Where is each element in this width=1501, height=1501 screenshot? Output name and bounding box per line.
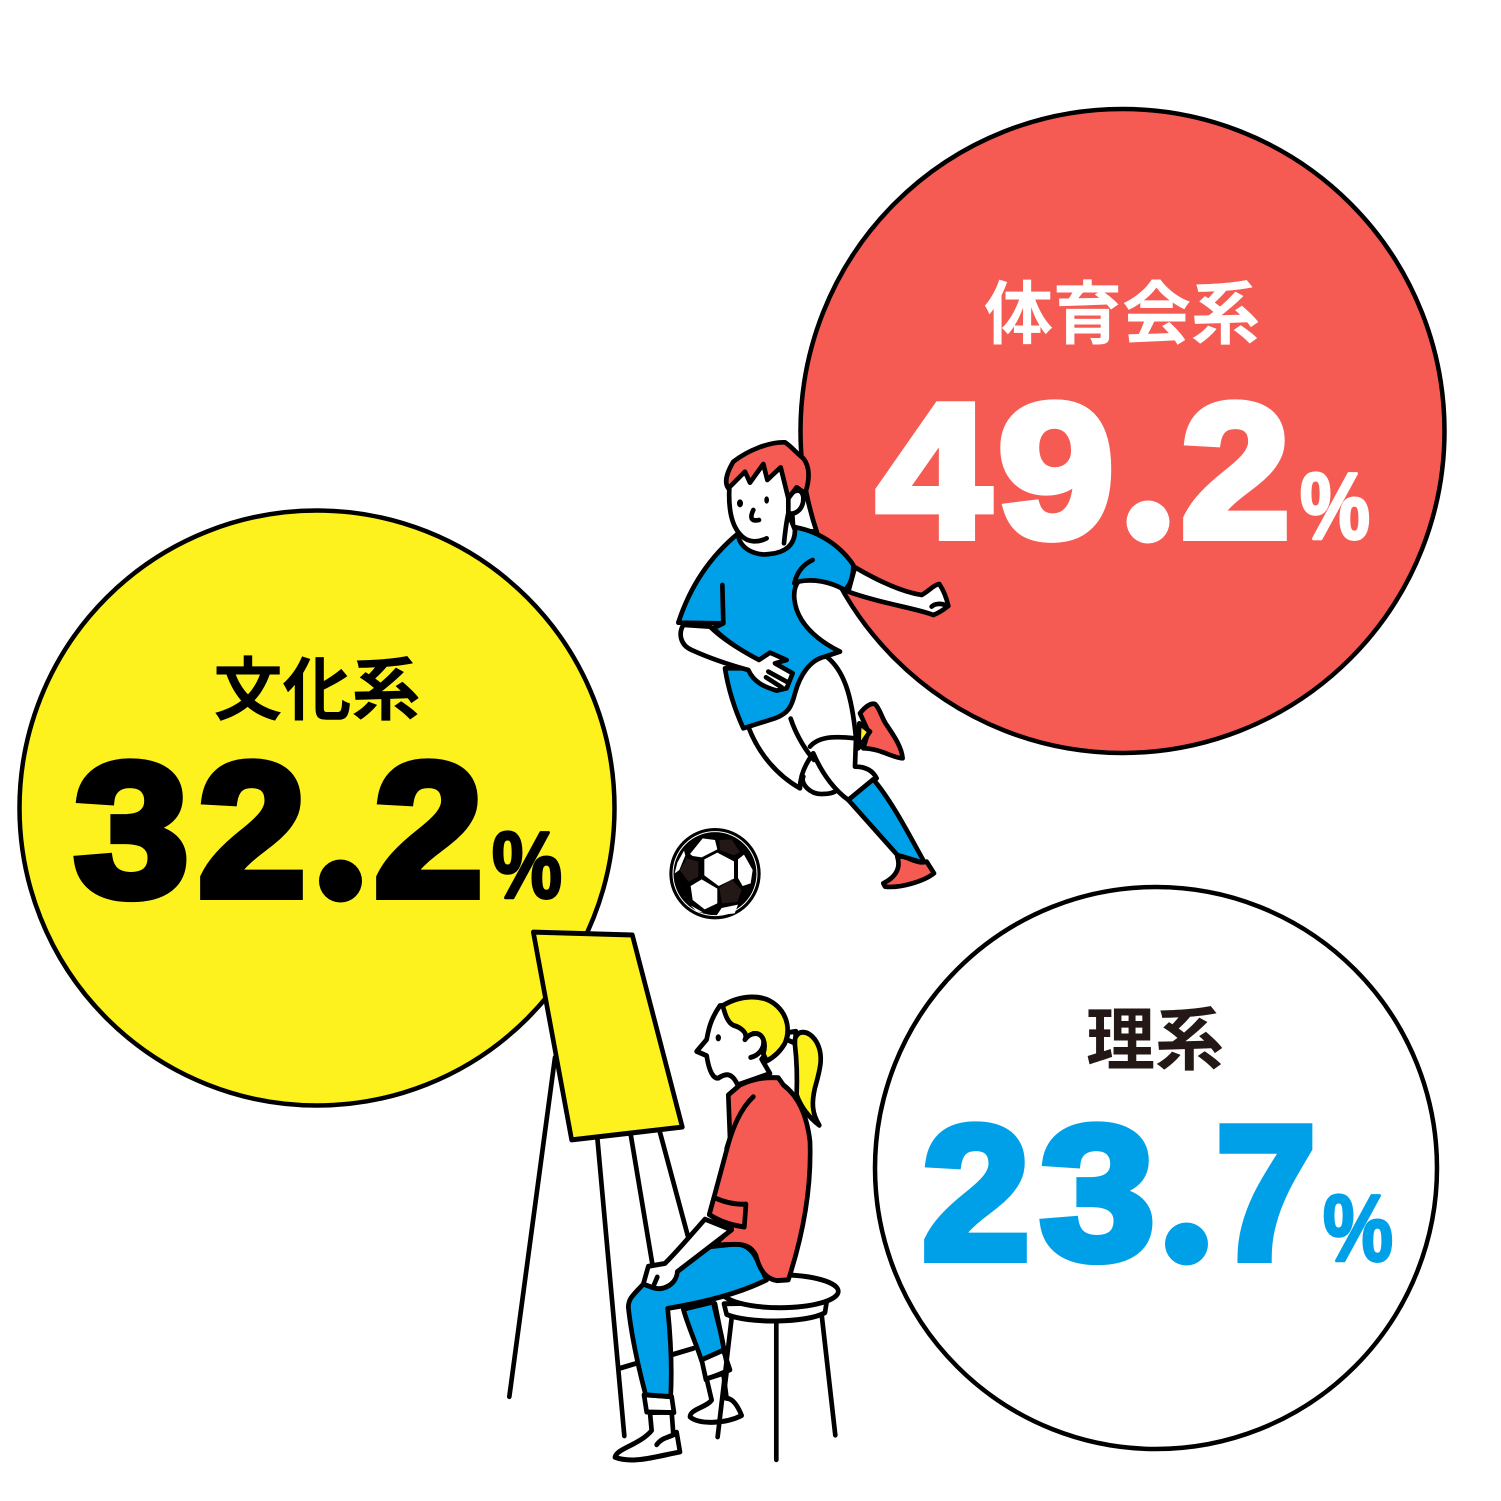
neck and face (697, 1006, 787, 1085)
value: 49.2% (877, 366, 1370, 578)
illustration: easel and painter (509, 932, 838, 1460)
jeans (628, 1244, 767, 1397)
value: 49.2%: % (1300, 454, 1370, 560)
stool front leg and easel rear leg (715, 1304, 732, 1437)
back arm (848, 567, 948, 615)
value: 23.7% (922, 1088, 1393, 1300)
heading: 理系: 理系 (1086, 1002, 1224, 1079)
value: 32.2%: 3 (74, 724, 189, 936)
face features (737, 499, 743, 507)
near cuff (644, 1395, 674, 1413)
value: 32.2%: 2 (198, 724, 306, 936)
hair (723, 997, 788, 1061)
value: 49.2%: 4 (877, 366, 990, 578)
easel legs (509, 1057, 693, 1436)
panel: 理系 circle (875, 887, 1437, 1449)
sock (848, 779, 925, 863)
value: 23.7%: 3 (1040, 1088, 1155, 1300)
value: 32.2%: . (333, 837, 350, 904)
front arm (681, 625, 793, 691)
heading: 文化系: 文化系 (214, 652, 420, 729)
value: 23.7%: % (1323, 1176, 1393, 1282)
value: 49.2%: 2 (1181, 366, 1290, 578)
ear (745, 1034, 764, 1057)
value: 23.7%: 7 (1216, 1088, 1316, 1300)
ball panels (675, 838, 753, 915)
illustration: soccer player (678, 442, 948, 887)
collar (738, 513, 795, 554)
value: 23.7%: 2 (922, 1088, 1030, 1300)
arm (643, 1219, 732, 1289)
shirt (709, 1078, 810, 1281)
value: 49.2%: . (1141, 478, 1158, 545)
hair band (787, 1031, 796, 1043)
ponytail (795, 1032, 821, 1125)
stool (722, 1275, 838, 1460)
icon: soccer ball (669, 828, 761, 919)
value: 23.7%: . (1179, 1200, 1196, 1267)
face (729, 463, 792, 543)
far leg (683, 1302, 724, 1361)
value: 32.2% (74, 724, 562, 936)
ear (788, 491, 803, 514)
heading: 体育会系: 体育会系 (984, 276, 1260, 353)
value: 32.2%: % (492, 813, 562, 919)
front foot (883, 856, 934, 887)
value: 32.2%: 2 (374, 724, 483, 936)
panel: 体育会系 circle (800, 109, 1444, 753)
near foot (615, 1412, 680, 1460)
neck back line (792, 495, 817, 532)
shirt (678, 527, 853, 728)
canvas (533, 932, 682, 1140)
hair (726, 442, 809, 498)
panel: 文化系 circle (20, 510, 614, 1106)
back foot (860, 704, 903, 758)
value: 49.2%: 9 (998, 366, 1114, 578)
shorts and thigh (748, 647, 877, 800)
